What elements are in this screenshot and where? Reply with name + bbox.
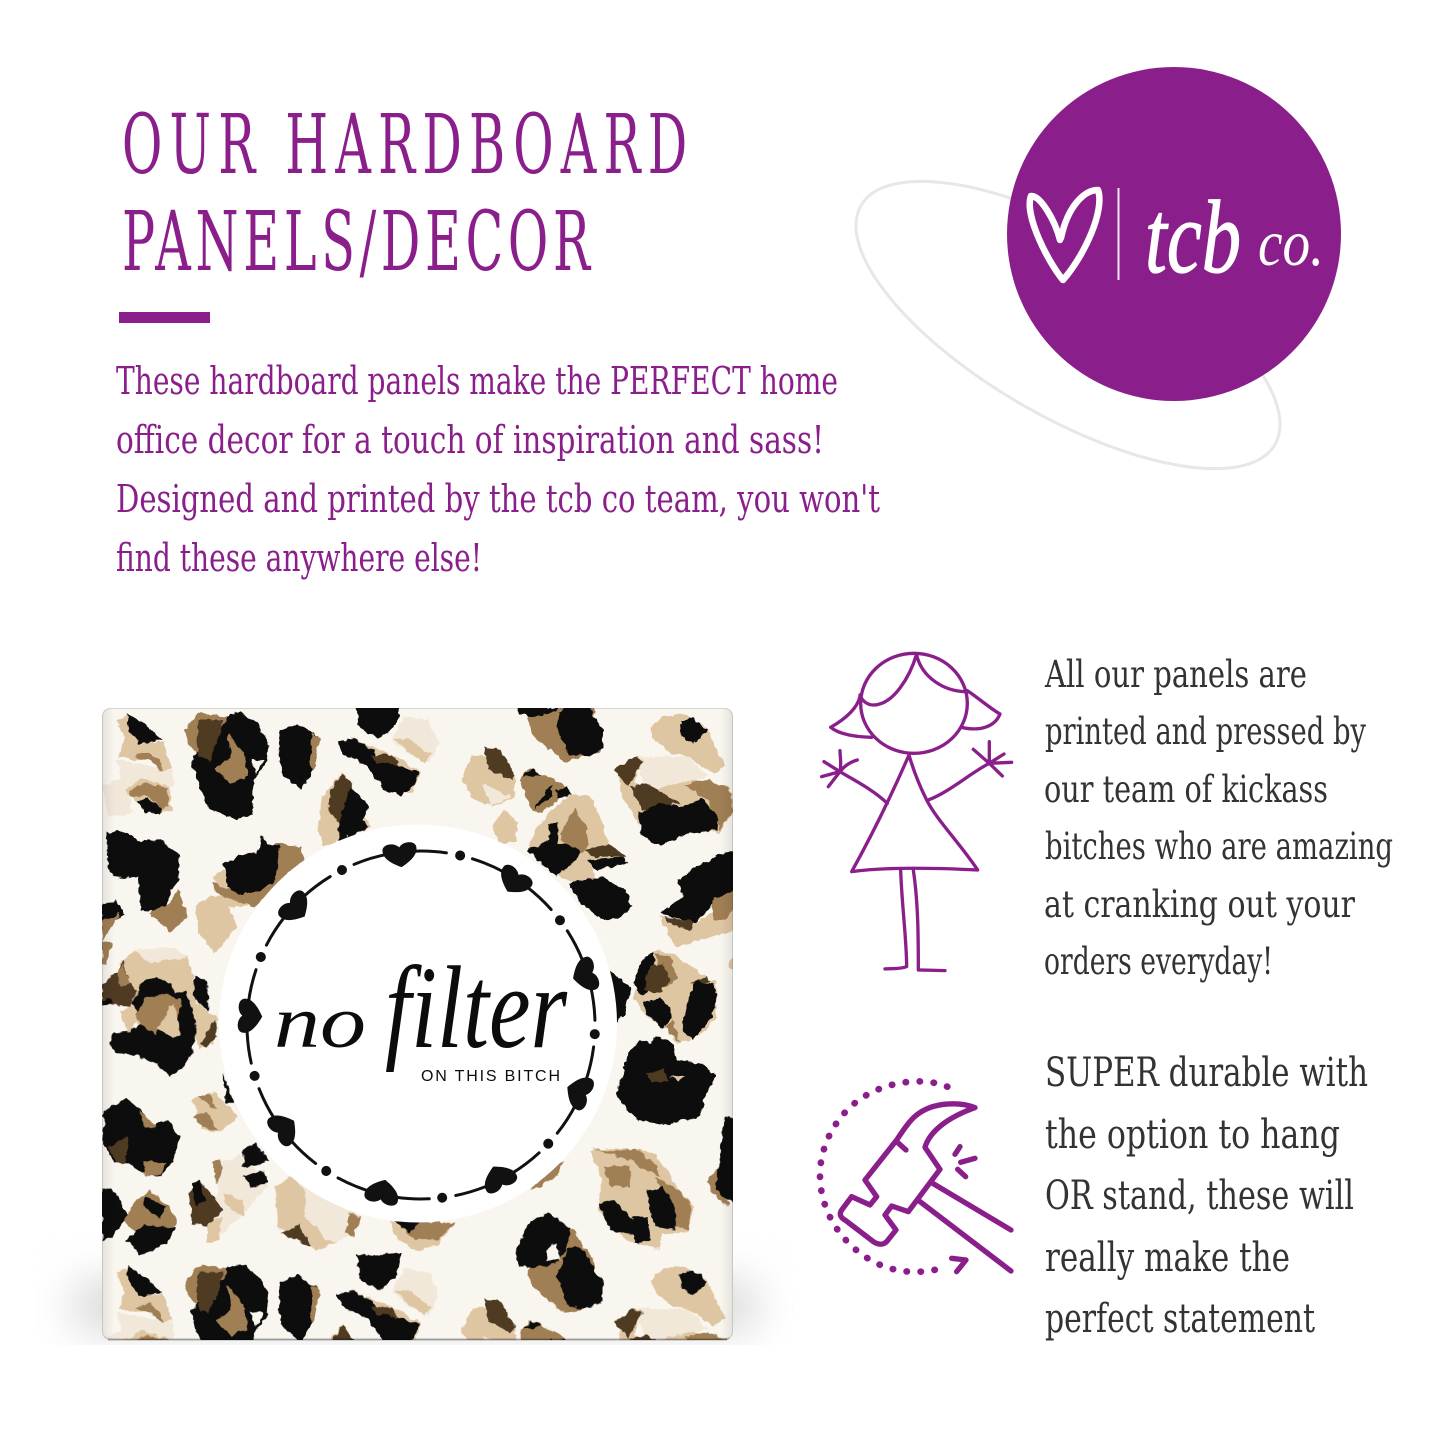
dashed heart ring [237, 841, 603, 1207]
first feature text [1044, 653, 1393, 983]
second feature text [1045, 1050, 1368, 1342]
icon: logo heart [1030, 190, 1099, 280]
title [122, 97, 687, 289]
second feature text: OR stand, these will [1045, 1173, 1354, 1219]
product slogan: filter [385, 942, 568, 1073]
title: OUR HARDBOARD [122, 97, 687, 192]
title: PANELS/DECOR [122, 194, 592, 289]
intro text block: office decor for a touch of inspiration and sass! [116, 418, 824, 462]
logo orbit ring [815, 126, 1321, 524]
second feature text: really make the [1045, 1235, 1290, 1281]
icon: stick figure girl [822, 653, 1012, 971]
intro text block: These hardboard panels make the PERFECT home [116, 359, 838, 403]
intro text block: Designed and printed by the tcb co team, you won't [116, 477, 880, 521]
intro text block [116, 359, 880, 580]
title underline bar [119, 312, 210, 323]
product slogan: ON THIS BITCH [421, 1068, 560, 1085]
product slogan: no [274, 982, 366, 1064]
left ring blob [102, 947, 217, 1077]
logo badge [1007, 67, 1341, 401]
white circle label [219, 824, 617, 1222]
panel: leopard print product [102, 708, 733, 1340]
first feature text: orders everyday! [1044, 940, 1273, 983]
first feature text: All our panels are [1044, 653, 1307, 696]
product slogan [274, 942, 568, 1085]
leopard print pattern [102, 708, 733, 1340]
product floor shadow [75, 1282, 755, 1330]
second feature text: perfect statement [1045, 1296, 1315, 1342]
second feature text: the option to hang [1045, 1112, 1340, 1158]
first feature text: at cranking out your [1044, 883, 1355, 926]
icon: hammer with dotted arrow [820, 1081, 1011, 1272]
logo badge: co. [1258, 207, 1324, 280]
first feature text: our team of kickass [1044, 768, 1328, 811]
intro text block: find these anywhere else! [116, 536, 482, 580]
right pair of blobs [610, 950, 717, 1125]
logo badge: tcb [1145, 180, 1241, 295]
